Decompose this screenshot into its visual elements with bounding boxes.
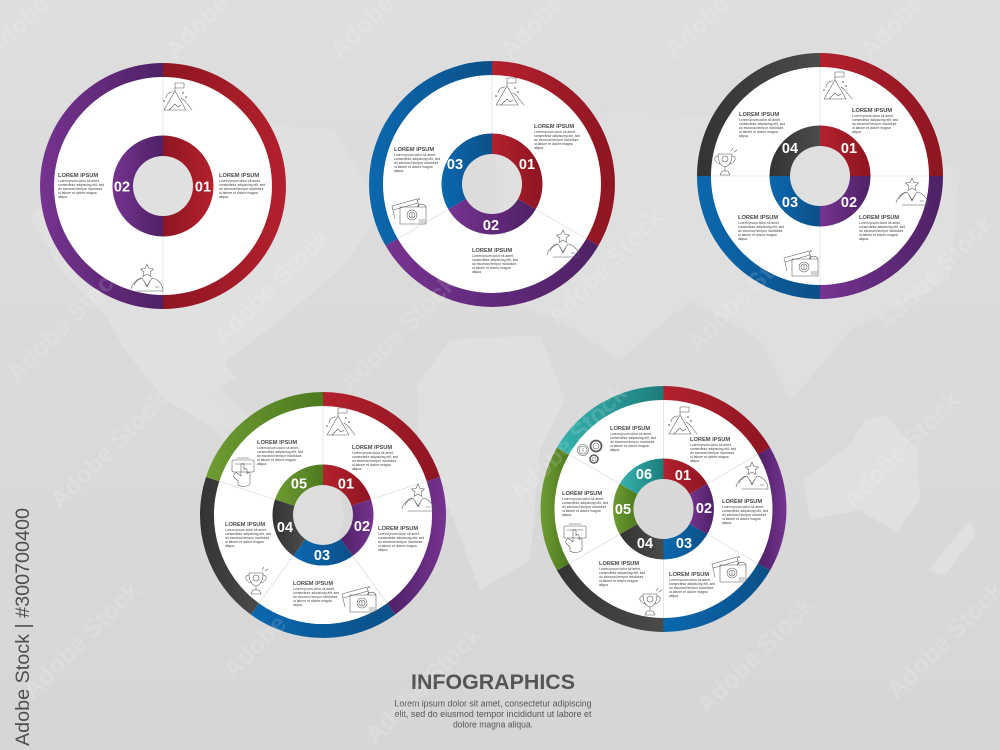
vertical credit: Adobe Stock | #300700400 [13,508,34,746]
text block 03: do eiusmod tempor incididunt [669,586,713,590]
white disc with hole [422,114,562,254]
text block 02: consectetur adipiscing elit, sed [378,536,424,540]
text block 05: do eiusmod tempor incididunt [562,505,606,509]
watermark: Adobe Stock [207,223,335,351]
donut segment 03 [770,176,820,226]
text block 03: LOREM IPSUM [738,215,778,221]
label 03: 03 [447,157,463,173]
label 04: 04 [637,536,653,552]
text block 03 [293,581,339,607]
watermark: Adobe Stock [359,621,487,749]
label 02: 02 [354,519,370,535]
icon: star person [547,230,579,257]
text block 03: aliqua. [394,169,404,173]
donut segment 04 [620,524,664,560]
text block 04: Lorem ipsum dolor sit amet, [739,118,781,122]
text block 05: Lorem ipsum dolor sit amet, [257,446,299,450]
icon: money and cards [784,250,818,276]
text block 02: consectetur adipiscing elit, sed [722,509,768,513]
text block 02 [472,248,518,274]
text block 01 [852,108,898,134]
label 04: 04 [277,520,293,536]
white disc with hole [253,445,393,585]
text block 03: consectetur adipiscing elit, sed [394,157,440,161]
text block 01: consectetur adipiscing elit, sed [352,455,398,459]
text block 03: do eiusmod tempor incididunt [738,229,782,233]
circle diagram: three segments [369,61,615,307]
watermark: Adobe Stock [871,209,999,337]
text block 02: aliqua. [859,237,869,241]
donut segment 04 [273,499,305,556]
icon: money and cards [342,586,376,612]
text block 01: Lorem ipsum dolor sit amet, [219,179,261,183]
text block 04: do eiusmod tempor incididunt [225,536,269,540]
text block 03 [669,572,715,598]
icon: star person [736,462,768,489]
text block 05: ut labore et dolore magna [257,458,296,462]
text block 03: ut labore et dolore magna [669,590,708,594]
text block 01: do eiusmod tempor incididunt [852,122,896,126]
circle diagram: five segments [200,392,446,638]
watermark: Adobe Stock [17,576,145,704]
label 04: 04 [782,141,798,157]
text block 03: consectetur adipiscing elit, sed [738,225,784,229]
text block 01: Lorem ipsum dolor sit amet, [690,443,732,447]
text block 01 [352,445,398,471]
label 01: 01 [195,180,211,196]
watermark: Adobe Stock [217,556,345,684]
ring segment 02 [820,176,943,299]
text block 01: do eiusmod tempor incididunt [352,459,396,463]
donut segment 01 [664,458,707,494]
watermark: Adobe Stock [44,386,172,514]
ring segment 01 [163,63,286,309]
text block 04: Lorem ipsum dolor sit amet, [225,528,267,532]
text block 02: do eiusmod tempor incididunt [859,229,903,233]
description: dolore magna aliqua. [453,720,533,730]
text block 01: Lorem ipsum dolor sit amet, [352,451,394,455]
world map backdrop [30,110,975,600]
label 01: 01 [841,141,857,157]
icon: gears and coin [578,440,602,463]
text block 06: do eiusmod tempor incididunt [610,440,654,444]
text block 01: aliqua. [219,195,229,199]
label 03: 03 [314,548,330,564]
text block 06: LOREM IPSUM [610,426,650,432]
description: Lorem ipsum dolor sit amet, consectetur adipiscing [394,698,592,708]
text block 05: consectetur adipiscing elit, sed [257,450,303,454]
icon: star person [131,264,163,291]
icon: trophy [246,567,268,594]
text block 01: consectetur adipiscing elit, sed [852,118,898,122]
text block 01: do eiusmod tempor incididunt [534,138,578,142]
text block 02 [859,215,905,241]
ring segment 02 [758,448,786,570]
text block 03: consectetur adipiscing elit, sed [669,582,715,586]
text block 01: do eiusmod tempor incididunt [690,451,734,455]
donut segment 04 [770,126,820,176]
text block 05: aliqua. [257,462,267,466]
label 01: 01 [519,157,535,173]
text block 04: aliqua. [225,544,235,548]
donut segment 02 [112,136,163,236]
text block 04: consectetur adipiscing elit, sed [739,122,785,126]
text block 01: consectetur adipiscing elit, sed [219,183,265,187]
white disc with hole [93,116,233,256]
icon: star person [896,178,928,205]
ring segment 03 [251,603,395,638]
white disc with hole [750,106,890,246]
text block 04: aliqua. [599,583,609,587]
text block 03: aliqua. [669,594,679,598]
text block 02: LOREM IPSUM [722,499,762,505]
ring segment 04 [557,564,664,632]
text block 02: ut labore et dolore magna [859,233,898,237]
text block 02: Lorem ipsum dolor sit amet, [378,532,420,536]
label 01: 01 [338,476,354,492]
text block 01: consectetur adipiscing elit, sed [690,447,736,451]
icon: hand [564,524,586,552]
text block 04: ut labore et dolore magna [739,130,778,134]
icon: star person [402,484,434,511]
watermark: Adobe Stock [1,259,129,387]
text block 01 [219,173,265,199]
label 05: 05 [291,476,307,492]
text block 05 [562,491,608,517]
text block 05 [257,440,303,466]
text block 05: do eiusmod tempor incididunt [257,454,301,458]
text block 02: ut labore et dolore magna [472,266,511,270]
text block 01: aliqua. [852,130,862,134]
watermark: Adobe Stock [691,591,819,719]
text block 02 [58,173,104,199]
text block 06: ut labore et dolore magna [610,444,649,448]
icon: mountain flag [495,78,524,105]
text block 03: do eiusmod tempor incididunt [394,161,438,165]
text block 03: Lorem ipsum dolor sit amet, [293,587,335,591]
text block 01: LOREM IPSUM [690,437,730,443]
watermark: Adobe Stock [681,229,809,357]
ring segment 01 [664,386,770,454]
text block 02: do eiusmod tempor incididunt [378,540,422,544]
label 02: 02 [483,218,499,234]
ring segment 03 [369,61,492,246]
label 06: 06 [636,467,652,483]
text block 04: LOREM IPSUM [599,561,639,567]
donut segment 01 [163,136,214,236]
text block 04: do eiusmod tempor incididunt [739,126,783,130]
text block 02: ut labore et dolore magna [378,544,417,548]
text block 01: LOREM IPSUM [352,445,392,451]
text block 02: consectetur adipiscing elit, sed [859,225,905,229]
ring segment 04 [200,477,259,614]
text block 03: ut labore et dolore magna [738,233,777,237]
donut segment 02 [820,176,870,226]
text block 04: LOREM IPSUM [225,522,265,528]
icon: trophy [640,588,662,615]
ring segment 02 [386,238,598,307]
text block 01: ut labore et dolore magna [352,463,391,467]
text block 03: ut labore et dolore magna [394,165,433,169]
ring segment 01 [820,53,943,176]
ring segment 01 [323,392,440,481]
text block 05: LOREM IPSUM [257,440,297,446]
text block 02: LOREM IPSUM [58,173,98,179]
ring segment 06 [557,386,664,454]
text block 01: LOREM IPSUM [219,173,259,179]
donut segment 03 [293,539,353,566]
description: elit, sed do eiusmod tempor incididunt ut labore et [394,709,592,719]
text block 02: aliqua. [722,521,732,525]
text block 01: consectetur adipiscing elit, sed [534,134,580,138]
text block 03: Lorem ipsum dolor sit amet, [738,221,780,225]
text block 01: aliqua. [352,467,362,471]
icon: trophy [715,148,737,175]
text block 02: consectetur adipiscing elit, sed [472,258,518,262]
donut segment 01 [323,464,371,506]
icon: hand [232,458,254,486]
text block 02: LOREM IPSUM [472,248,512,254]
text block 02: aliqua. [58,195,68,199]
ring segment 05 [206,392,323,481]
white disc with hole [594,439,734,579]
text block 05: aliqua. [562,513,572,517]
text block 04: ut labore et dolore magna [599,579,638,583]
donut segment 06 [620,458,664,494]
circle diagram: six segments [541,386,786,632]
text block 01: aliqua. [534,146,544,150]
text block 03: Lorem ipsum dolor sit amet, [394,153,436,157]
donut segment 01 [820,126,870,176]
text block 01: Lorem ipsum dolor sit amet, [534,130,576,134]
text block 02: aliqua. [472,270,482,274]
text block 03: LOREM IPSUM [293,581,333,587]
text block 06: consectetur adipiscing elit, sed [610,436,656,440]
text block 04: Lorem ipsum dolor sit amet, [599,567,641,571]
text block 05: consectetur adipiscing elit, sed [562,501,608,505]
watermark: Adobe Stock [504,379,632,507]
donut segment 02 [341,499,373,556]
text block 01: ut labore et dolore magna [852,126,891,130]
text block 02 [722,499,768,525]
donut segment 01 [492,134,542,209]
text block 01: Lorem ipsum dolor sit amet, [852,114,894,118]
text block 01: ut labore et dolore magna [534,142,573,146]
text block 04: consectetur adipiscing elit, sed [599,571,645,575]
text block 06 [610,426,656,452]
text block 05: LOREM IPSUM [562,491,602,497]
text block 01: LOREM IPSUM [852,108,892,114]
text block 04 [739,112,785,138]
text block 06: Lorem ipsum dolor sit amet, [610,432,652,436]
icon: money and cards [392,198,426,224]
text block 02: LOREM IPSUM [859,215,899,221]
text block 02: Lorem ipsum dolor sit amet, [722,505,764,509]
ring segment 05 [541,448,569,570]
ring segment 02 [40,63,163,309]
label 02: 02 [841,195,857,211]
text block 03 [394,147,440,173]
donut segment 05 [275,464,323,506]
text block 05: Lorem ipsum dolor sit amet, [562,497,604,501]
label 03: 03 [782,195,798,211]
icon: mountain flag [326,408,355,435]
label 03: 03 [676,536,692,552]
text block 01: aliqua. [690,459,700,463]
text block 01: ut labore et dolore magna [219,191,258,195]
text block 01 [534,124,580,150]
text block 03: Lorem ipsum dolor sit amet, [669,578,711,582]
text block 04: ut labore et dolore magna [225,540,264,544]
ring segment 03 [664,564,770,632]
icon: mountain flag [668,407,697,434]
text block 02: aliqua. [378,548,388,552]
text block 02: do eiusmod tempor incididunt [58,187,102,191]
text block 03: consectetur adipiscing elit, sed [293,591,339,595]
icon: mountain flag [163,83,192,110]
text block 03: LOREM IPSUM [394,147,434,153]
text block 01: ut labore et dolore magna [690,455,729,459]
text block 01: do eiusmod tempor incididunt [219,187,263,191]
text block 02: do eiusmod tempor incididunt [722,513,766,517]
text block 04: consectetur adipiscing elit, sed [225,532,271,536]
text block 02: Lorem ipsum dolor sit amet, [472,254,514,258]
donut segment 02 [448,199,536,234]
icon: money and cards [712,556,746,582]
text block 04: LOREM IPSUM [739,112,779,118]
circle diagram: two segments [40,63,286,309]
text block 02: consectetur adipiscing elit, sed [58,183,104,187]
label 05: 05 [615,502,631,518]
text block 02: Lorem ipsum dolor sit amet, [859,221,901,225]
text block 01: LOREM IPSUM [534,124,574,130]
text block 04 [225,522,271,548]
circle diagram: four segments [697,53,943,299]
text block 02: Lorem ipsum dolor sit amet, [58,179,100,183]
text block 03: do eiusmod tempor incididunt [293,595,337,599]
title: INFOGRAPHICS [411,671,575,694]
text block 01 [690,437,736,463]
donut segment 02 [690,484,714,534]
text block 05: ut labore et dolore magna [562,509,601,513]
text block 02: do eiusmod tempor incididunt [472,262,516,266]
text block 03: ut labore et dolore magna [293,599,332,603]
ring segment 03 [697,176,820,299]
label 01: 01 [675,468,691,484]
donut segment 05 [613,484,638,534]
text block 02 [378,526,424,552]
text block 02: LOREM IPSUM [378,526,418,532]
text block 04: do eiusmod tempor incididunt [599,575,643,579]
donut segment 03 [664,524,707,560]
text block 03: aliqua. [293,603,303,607]
label 02: 02 [696,501,712,517]
watermark: Adobe Stock [334,269,462,397]
text block 02: ut labore et dolore magna [722,517,761,521]
watermark: Adobe Stock [541,203,669,331]
icon: mountain flag [823,72,852,99]
ring segment 04 [697,53,820,176]
donut segment 03 [442,134,492,209]
text block 06: aliqua. [610,448,620,452]
description [394,698,592,730]
text block 03: aliqua. [738,237,748,241]
text block 04: aliqua. [739,134,749,138]
ring segment 02 [387,477,446,614]
text block 03: LOREM IPSUM [669,572,709,578]
label 02: 02 [114,180,130,196]
ring segment 01 [492,61,615,246]
watermark: Adobe Stock [837,386,965,514]
text block 04 [599,561,645,587]
text block 02: ut labore et dolore magna [58,191,97,195]
text block 03 [738,215,784,241]
